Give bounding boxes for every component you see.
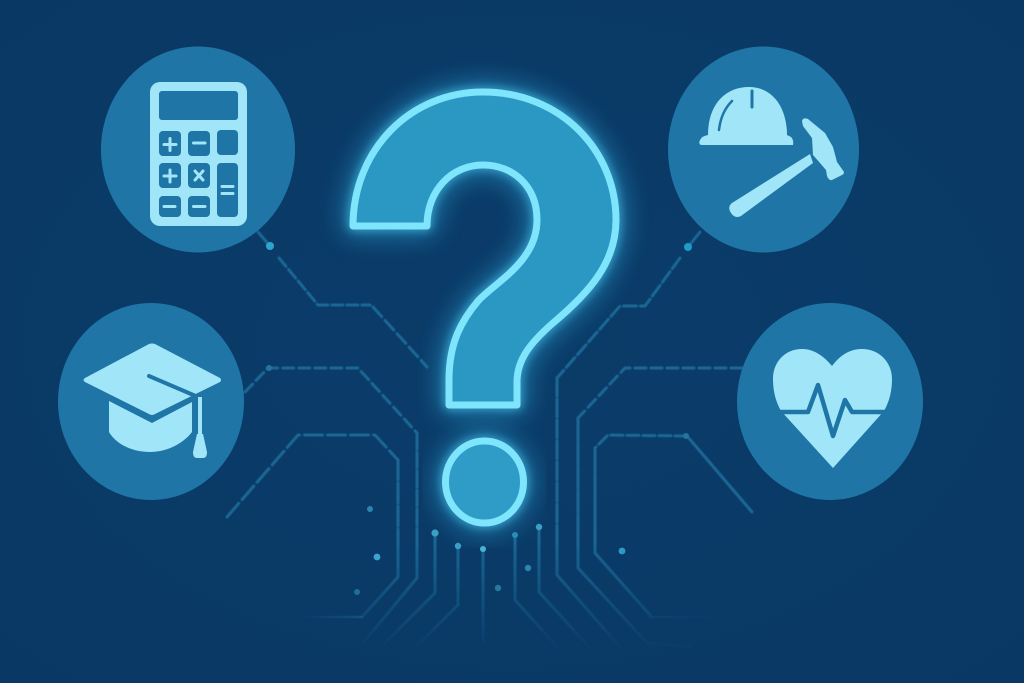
question mark glow: [353, 92, 616, 523]
icon: hard hat: [699, 87, 793, 145]
heart circle: [737, 303, 923, 500]
calculator circle: [101, 46, 295, 252]
question mark dot: [446, 441, 524, 523]
left circuit: calculator link: [258, 232, 427, 367]
right circuit: heart link: [578, 368, 742, 647]
circuit lines: [227, 232, 752, 650]
circuit nodes: [266, 242, 692, 595]
panel: calculator: [101, 46, 295, 252]
hard hat circle: [668, 46, 859, 252]
panel: heart: [737, 303, 923, 500]
panel: hard hat and hammer: [668, 46, 859, 252]
icon: graduation cap: [84, 344, 221, 458]
right circuit: outer link: [595, 435, 752, 617]
question mark hook: [353, 92, 616, 405]
centre circuit pins: [385, 527, 590, 650]
left circuit: cap link: [245, 368, 417, 643]
icon: calculator: [150, 82, 247, 226]
icon: hammer: [729, 118, 844, 217]
right circuit: hard hat link: [557, 232, 700, 647]
graduation cap circle: [58, 303, 244, 500]
icon: heart with pulse: [773, 349, 892, 468]
panel: graduation cap: [58, 303, 244, 500]
left circuit: outer link: [227, 435, 398, 617]
question mark: [353, 92, 616, 523]
